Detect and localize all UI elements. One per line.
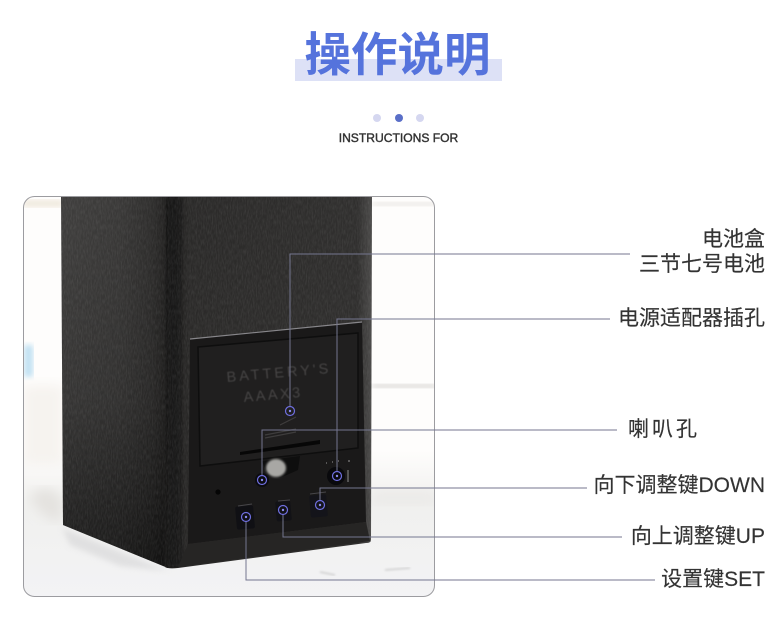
subtitle: INSTRUCTIONS FOR: [339, 131, 458, 145]
label: power socket: 电源适配器插孔: [618, 307, 765, 330]
leader: set button: [242, 512, 655, 580]
leader: power socket: [332, 319, 610, 480]
title highlight bar: [295, 59, 502, 81]
embossed battery text: [227, 363, 328, 402]
speaker hole: [262, 456, 300, 478]
embossed battery text: BATTERY'S: [226, 361, 332, 386]
product diagram: [23, 196, 655, 597]
label: speaker: 喇叭孔: [628, 418, 700, 441]
control plate: [188, 322, 366, 544]
title text: 操作说明: [304, 18, 490, 85]
door slot: [240, 440, 320, 455]
label: up button: 向上调整键UP: [631, 525, 765, 548]
label: battery box: 三节七号电池: [639, 253, 765, 276]
pagination dots: [373, 114, 424, 122]
product box: [61, 196, 373, 569]
label: battery box: [639, 228, 765, 276]
label: battery box: 电池盒: [702, 228, 765, 251]
battery door: [198, 333, 358, 466]
box front face: [165, 196, 372, 568]
buttons: [309, 494, 328, 518]
box left face: [61, 196, 168, 568]
photo background: [23, 196, 436, 598]
label: down button: 向下调整键DOWN: [594, 474, 765, 497]
leader: battery box: [286, 254, 630, 416]
box surface grain: [61, 196, 373, 569]
power socket: [327, 467, 345, 485]
leader: speaker: [258, 430, 617, 484]
pin hole: [215, 489, 221, 495]
label: set button: 设置键SET: [661, 568, 765, 591]
leader: down button: [316, 488, 587, 510]
leader: up button: [278, 506, 622, 537]
embossed battery text: AAAX3: [243, 385, 303, 406]
title: [295, 18, 502, 85]
card outline: [24, 196, 434, 596]
